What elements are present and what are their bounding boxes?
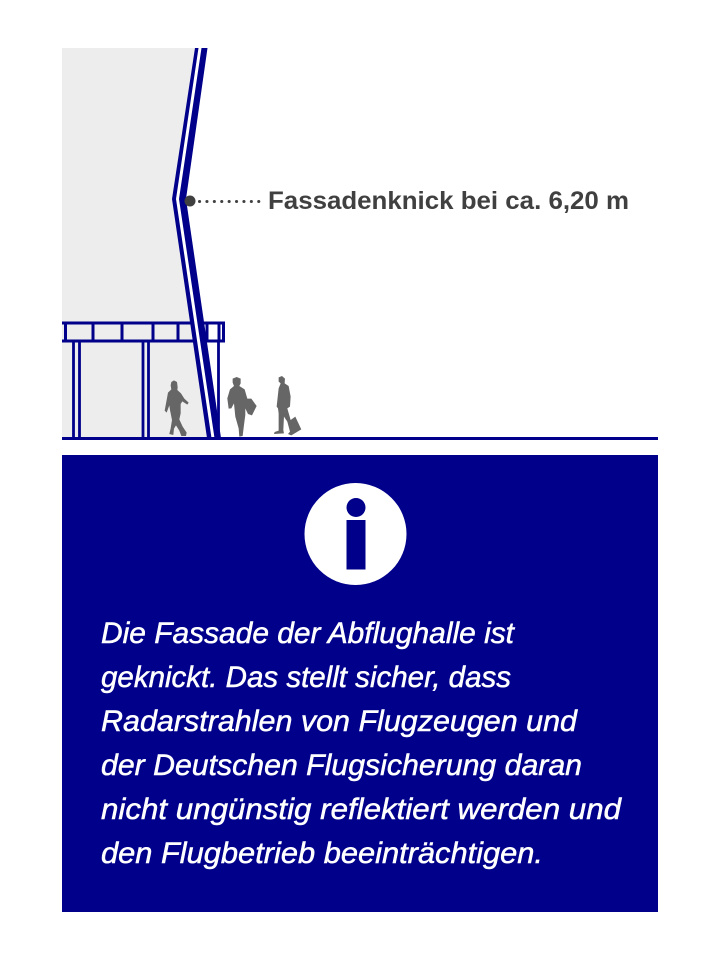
building interior [62, 48, 209, 438]
person: man with suitcase [274, 376, 301, 435]
information text: geknickt. Das stellt sicher, dass [101, 661, 511, 694]
information text: der Deutschen Flugsicherung daran [101, 749, 582, 782]
information text: Radarstrahlen von Flugzeugen und [101, 705, 578, 738]
marker dot [184, 196, 196, 206]
callout: Fassadenknick [184, 187, 629, 215]
panel: building section [62, 48, 658, 440]
information text [101, 617, 622, 870]
columns [74, 341, 218, 438]
ground line [62, 437, 658, 440]
information text: Die Fassade der Abflughalle ist [101, 617, 516, 650]
icon: information [304, 483, 406, 585]
information text: den Flugbetrieb beeinträchtigen. [101, 837, 543, 870]
information text: nicht ungünstig reflektiert werden und [101, 793, 622, 826]
roof canopy [62, 323, 224, 341]
panel background [62, 455, 658, 912]
dotted leader [200, 200, 260, 203]
person: walking woman [165, 380, 189, 436]
facade with knick [172, 48, 221, 438]
person: man with bag [227, 377, 257, 437]
panel: information [62, 455, 658, 912]
callout label: Fassadenknick bei ca. 6,20 m [268, 187, 629, 215]
